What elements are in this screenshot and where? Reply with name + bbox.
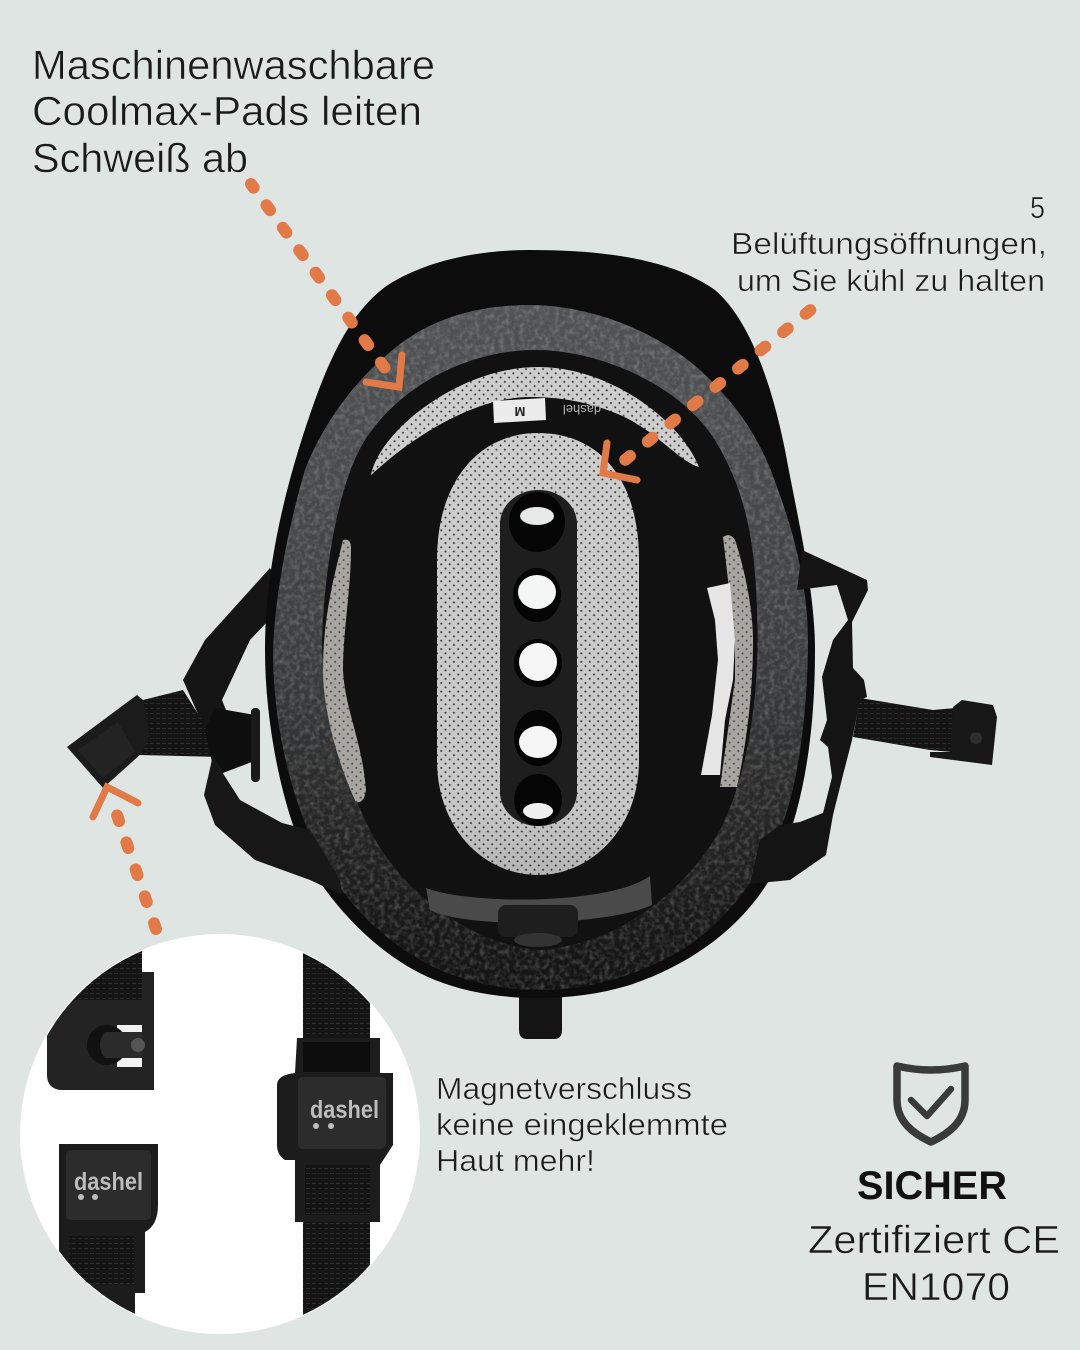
buckle xyxy=(67,695,150,788)
white care label xyxy=(701,583,735,775)
strap loop xyxy=(750,550,868,884)
strap arm xyxy=(853,698,955,752)
center mesh pad xyxy=(437,433,639,875)
right chin strap with buckle xyxy=(750,550,997,884)
buckle: right xyxy=(277,945,393,1340)
center pad shading xyxy=(437,433,639,875)
ventilation holes xyxy=(509,492,565,826)
text: ventilation: 5 xyxy=(1030,190,1045,225)
helmet xyxy=(265,250,815,998)
rear adjuster band xyxy=(426,876,652,923)
buckle rivet xyxy=(970,732,982,744)
right side pad xyxy=(720,535,753,787)
buckle face xyxy=(78,722,135,778)
upper strap band xyxy=(183,568,288,730)
white disc xyxy=(20,934,420,1334)
inner cavity xyxy=(322,350,758,950)
left side pad xyxy=(323,540,366,802)
rivet ring xyxy=(251,708,260,782)
inset circle: magnetic buckle xyxy=(20,934,420,1340)
buckle: bottom left: dashel xyxy=(74,1168,143,1196)
text: ventilation xyxy=(731,190,1047,298)
text: coolmax pads: Coolmax-Pads leiten xyxy=(32,88,422,134)
arrow: to ventilation holes xyxy=(603,310,810,480)
text: coolmax pads: Schweiß ab xyxy=(32,135,248,181)
size label: M xyxy=(515,404,525,419)
foam texture xyxy=(273,305,808,990)
buckle xyxy=(930,700,997,765)
buckle: bottom left xyxy=(59,1144,158,1330)
icon: safety shield xyxy=(897,1066,965,1142)
inner brand mark: dashel xyxy=(563,402,601,417)
arrow: to coolmax pad xyxy=(251,184,402,387)
left lower strap band xyxy=(204,755,342,895)
text: magnetic closure: keine eingeklemmte xyxy=(436,1107,728,1142)
certification text xyxy=(808,1164,1060,1309)
text: ventilation: Belüftungsöffnungen, xyxy=(731,226,1047,261)
text: coolmax pads: Maschinenwaschbare xyxy=(32,42,435,88)
top crescent pad xyxy=(371,367,699,475)
text: magnetic closure xyxy=(436,1071,728,1178)
arrow: to magnetic buckle xyxy=(93,787,156,929)
size label xyxy=(493,398,546,423)
text: magnetic closure: Haut mehr! xyxy=(436,1143,595,1178)
center vent strip xyxy=(500,490,577,826)
buckle: top left xyxy=(40,950,154,1090)
strap arm xyxy=(140,690,222,757)
text: ventilation: um Sie kühl zu halten xyxy=(737,263,1045,298)
text: magnetic closure: Magnetverschluss xyxy=(436,1071,692,1106)
strap to rivet xyxy=(205,708,257,776)
buckle: right: dashel xyxy=(310,1096,379,1124)
bottom tab xyxy=(519,990,562,1039)
left chin strap with buckle xyxy=(67,568,288,788)
certification text: Zertifiziert CE xyxy=(808,1219,1060,1262)
foam liner xyxy=(273,305,808,990)
rear adjuster dial xyxy=(498,905,578,947)
certification text: EN1070 xyxy=(862,1266,1010,1309)
text: coolmax pads xyxy=(32,42,435,181)
label: sicher: SICHER xyxy=(857,1164,1007,1208)
outer shell xyxy=(265,250,815,998)
